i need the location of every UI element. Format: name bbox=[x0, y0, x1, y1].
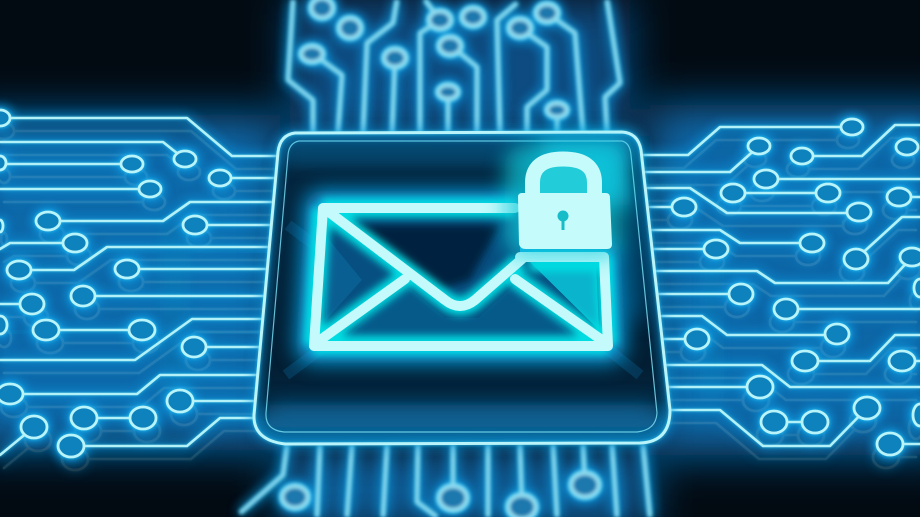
icon: envelope bbox=[313, 208, 608, 346]
circuit: right traces bbox=[641, 119, 920, 455]
circuit: bottom traces bbox=[240, 445, 650, 517]
circuit: top traces, out of focus bbox=[288, 0, 620, 133]
icon: keyhole bbox=[558, 210, 568, 230]
icon: padlock bbox=[505, 145, 623, 257]
circuit: left traces bbox=[0, 110, 278, 457]
circuit: reflected ghost traces bbox=[0, 123, 920, 470]
chip panel bbox=[254, 132, 670, 444]
